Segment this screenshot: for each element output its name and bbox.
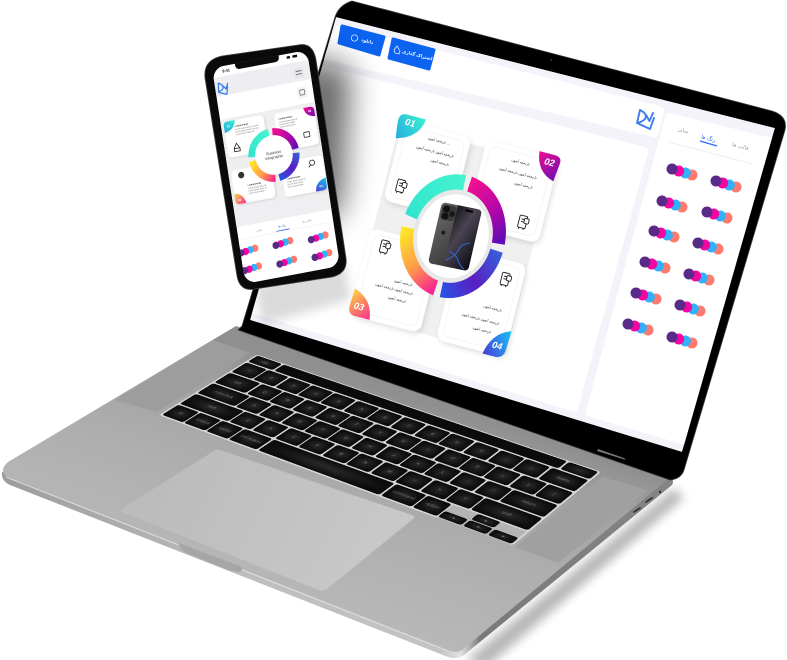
base top surface bbox=[3, 326, 669, 652]
card 01 number: 01 bbox=[404, 117, 416, 129]
phone card 04 number: 04 bbox=[319, 184, 323, 188]
phone card 04 tag bbox=[314, 178, 327, 192]
infographic grey backdrop bbox=[352, 125, 553, 355]
keyboard: X bbox=[267, 427, 274, 430]
keyboard: 4 bbox=[335, 400, 342, 403]
phone card 03 text: Lorem ipsum dolor bbox=[249, 190, 265, 195]
icon: cloud download bbox=[351, 35, 358, 41]
phone card 01 tag bbox=[224, 120, 235, 133]
download button bbox=[339, 26, 384, 55]
keyboard: U bbox=[400, 439, 407, 443]
phone ring chart bbox=[249, 128, 299, 182]
card 04 icon bbox=[500, 272, 512, 288]
phone tab other: سایر bbox=[255, 227, 263, 233]
infographic on screen bbox=[346, 112, 562, 361]
keyboard: : bbox=[465, 480, 471, 483]
keyboard: { bbox=[500, 474, 505, 478]
phone card 02 bbox=[274, 106, 319, 151]
keyboard: J bbox=[391, 453, 397, 457]
base front lip bbox=[2, 472, 673, 658]
phone card 04 text: LOREM IPSUM bbox=[287, 176, 301, 181]
keyboard: O bbox=[449, 456, 456, 460]
keyboard: H bbox=[366, 444, 374, 448]
side panel tabs bbox=[677, 128, 748, 150]
icon: share bbox=[394, 46, 400, 54]
keyboard: S bbox=[273, 411, 280, 415]
keyboard: G bbox=[342, 436, 350, 440]
keyboard: A bbox=[251, 403, 258, 407]
card 01 tag bbox=[394, 113, 426, 144]
keyboard: F bbox=[319, 428, 326, 431]
thumb notch bbox=[178, 543, 242, 572]
phone card 02 text: Lorem ipsum dolor sit bbox=[279, 117, 298, 124]
card 03 text: تاریخچه آیفون bbox=[394, 279, 413, 287]
card 02 text bbox=[496, 155, 540, 190]
ring segment magenta bbox=[457, 184, 511, 244]
smartphone bbox=[205, 45, 346, 289]
phone card 03 icon bbox=[238, 171, 245, 179]
card 03 text: تاریخچه آیفون bbox=[387, 295, 407, 304]
keyboard: ▸ bbox=[500, 534, 507, 538]
phone tabs bbox=[255, 218, 313, 236]
card 01 bbox=[378, 113, 473, 218]
keyboard: M bbox=[386, 469, 394, 474]
colour palette swatches bbox=[622, 164, 742, 348]
keyboard: - bbox=[504, 458, 509, 461]
keyboard: 1 bbox=[268, 376, 274, 380]
keyboard: < bbox=[411, 478, 418, 482]
keyboard: Z bbox=[245, 418, 252, 422]
tab: templates: قالب ها bbox=[731, 142, 750, 152]
phone card 04 text: Lorem ipsum dolor bbox=[288, 181, 304, 186]
phone card 01 text: Lorem ipsum dolor sit amet bbox=[235, 126, 259, 134]
phone card 04 text: Lorem ipsum dolor bbox=[288, 184, 304, 189]
front edge highlight bbox=[6, 477, 448, 651]
keyboard: ▾ bbox=[475, 525, 482, 529]
phone card 04 text bbox=[287, 175, 307, 189]
phone ring chart: infographic bbox=[265, 154, 284, 161]
keyboard: delete bbox=[555, 475, 572, 483]
hinge strip bbox=[597, 449, 626, 460]
keyboard: W bbox=[283, 398, 292, 402]
phone ring centre bbox=[252, 131, 296, 178]
camera module bbox=[440, 204, 457, 222]
phone card 03 text: LOREM IPSUM bbox=[248, 183, 262, 187]
iphone photo bbox=[428, 202, 482, 271]
keyboard: esc bbox=[260, 360, 271, 365]
keyboard: ? bbox=[462, 497, 468, 501]
phone screen bbox=[208, 46, 340, 284]
laptop screen bbox=[250, 17, 775, 452]
ring rim bbox=[403, 180, 503, 292]
usb-c ports bbox=[634, 491, 661, 512]
status icons bbox=[286, 54, 297, 59]
phone logo bbox=[218, 82, 228, 95]
phone card 01 text: Lorem ipsum dolor sit amet bbox=[235, 124, 259, 131]
keyboard: L bbox=[440, 470, 446, 474]
card 04 bbox=[436, 247, 528, 359]
logo bbox=[637, 110, 654, 129]
phone tab templates: قالب ها bbox=[302, 218, 312, 224]
keyboard: return bbox=[520, 499, 538, 507]
phone ring magenta bbox=[272, 128, 296, 153]
phone tab underline bbox=[276, 228, 290, 232]
keyboard: N bbox=[362, 460, 369, 465]
phone card 02 text: Lorem ipsum dolor bbox=[280, 124, 296, 129]
keyboard: 7 bbox=[405, 424, 412, 427]
ring segment blue bbox=[441, 240, 497, 301]
phone card 01 number: 01 bbox=[226, 124, 231, 129]
keyboard: B bbox=[338, 452, 345, 456]
phone ring blue bbox=[276, 153, 299, 177]
ring segment teal bbox=[411, 172, 465, 228]
phone card 02 text: Lorem ipsum dolor bbox=[279, 121, 296, 126]
laptop base bbox=[2, 326, 673, 658]
card 03 text: تاریخچه آیفون تاریخچه آیفون bbox=[375, 282, 414, 296]
phone card 02 text: LOREM IPSUM bbox=[278, 116, 293, 121]
keyboard: E bbox=[307, 406, 314, 410]
phone card 03 number: 03 bbox=[238, 198, 242, 202]
card 02 icon bbox=[517, 215, 530, 231]
keyboard bbox=[160, 355, 600, 545]
keyboard: 6 bbox=[382, 416, 388, 419]
notch bbox=[234, 56, 279, 69]
keyboard: shift bbox=[500, 510, 513, 517]
card 03 bbox=[348, 227, 441, 333]
phone top band bbox=[214, 60, 311, 97]
tab: colours: رنگ ها bbox=[700, 133, 717, 144]
card 03 text bbox=[373, 274, 416, 305]
keyboard: D bbox=[296, 419, 303, 423]
tab: other: سایر bbox=[676, 127, 690, 135]
keyboard: + bbox=[528, 466, 535, 470]
keyboard: R bbox=[329, 414, 337, 418]
card 02 text: تاریخچه آیفون تاریخچه آیفون bbox=[499, 166, 537, 180]
keyboard: ~ bbox=[246, 369, 253, 372]
phone card 02 icon bbox=[304, 131, 310, 138]
phone card 03 text: Lorem ipsum dolor sit bbox=[248, 186, 267, 193]
brand mark bbox=[441, 230, 446, 235]
card 01 text: تاریخچه آیفون bbox=[430, 158, 450, 167]
wallpaper curves bbox=[444, 239, 470, 269]
button label: دانلود bbox=[361, 37, 375, 45]
card 02 bbox=[466, 138, 562, 244]
phone tab colours: رنگ ها bbox=[278, 223, 287, 228]
phone card 01 bbox=[223, 115, 269, 158]
keyboard: fn bbox=[177, 411, 185, 415]
keyboard: 3 bbox=[313, 392, 319, 395]
card 04 text: تاریخچه آیفون bbox=[483, 304, 503, 313]
phone card 01 icon bbox=[233, 143, 240, 152]
card 02 tag bbox=[533, 151, 562, 182]
card 04 tag bbox=[482, 326, 512, 359]
screen background bbox=[250, 17, 775, 452]
phone card 03 text: Lorem ipsum dolor sit bbox=[248, 184, 267, 190]
phone ring teal bbox=[249, 132, 272, 157]
keyboard: P bbox=[474, 465, 481, 469]
phone card 03 tag bbox=[234, 192, 246, 205]
keyboard: option bbox=[424, 501, 441, 510]
right speaker grille bbox=[515, 477, 648, 563]
printer button bbox=[296, 86, 308, 98]
active tab underline bbox=[700, 141, 717, 146]
card 04 number: 04 bbox=[491, 340, 503, 352]
trackpad bbox=[122, 450, 414, 590]
phone palette swatches bbox=[237, 230, 333, 275]
keyboard: command bbox=[391, 490, 417, 500]
soft shadow under laptop bbox=[466, 488, 684, 660]
phone ring yellow bbox=[252, 157, 276, 182]
left speaker grille bbox=[115, 340, 250, 412]
phone card 02 number: 02 bbox=[308, 109, 312, 113]
camera bbox=[550, 59, 552, 61]
phone card 03 bbox=[231, 163, 276, 205]
keyboard: 2 bbox=[290, 384, 297, 387]
share button bbox=[389, 39, 434, 69]
keyboard: 8 bbox=[429, 432, 436, 436]
card 03 icon bbox=[379, 240, 392, 256]
keyboard: V bbox=[314, 443, 321, 447]
keyboard: option bbox=[217, 426, 233, 433]
keyboard: > bbox=[436, 487, 443, 491]
card 01 text: تاریخچه آیفون تاریخچه آیفون bbox=[416, 145, 454, 159]
ring chart bbox=[395, 172, 511, 301]
phone back bbox=[428, 202, 482, 271]
ring segment yellow bbox=[395, 228, 448, 288]
card 01 icon bbox=[395, 179, 408, 195]
keyboard: C bbox=[290, 435, 298, 439]
keyboard: caps lock bbox=[213, 390, 235, 399]
phone card 03 text bbox=[248, 182, 268, 195]
status time: 9:41 bbox=[222, 67, 231, 74]
card 03 number: 03 bbox=[353, 300, 366, 313]
side panel bbox=[586, 113, 772, 445]
keyboard: 0 bbox=[478, 449, 485, 453]
phone shadow on screen bbox=[300, 55, 350, 240]
keyboard: I bbox=[425, 448, 431, 451]
button label: اشتراک گذاری bbox=[402, 48, 434, 61]
card 01 text bbox=[413, 134, 457, 168]
phone card 02 text bbox=[278, 116, 298, 128]
card 04 text bbox=[459, 299, 503, 336]
keyboard: Y bbox=[376, 431, 383, 435]
laptop lid bbox=[238, 1, 785, 480]
phone card 04 text: Lorem ipsum dolor sit bbox=[287, 177, 306, 184]
dynamic island bbox=[465, 209, 473, 213]
card 02 text: تاریخچه آیفون bbox=[514, 181, 533, 190]
keyboard: " bbox=[491, 489, 496, 492]
keyboard: | bbox=[552, 492, 557, 496]
keyboard: T bbox=[353, 422, 360, 426]
phone card 04 bbox=[280, 155, 327, 197]
phone card 01 text bbox=[234, 123, 258, 136]
keyboard: ▴ bbox=[483, 518, 490, 523]
card 02 text: تاریخچه آیفون bbox=[511, 158, 531, 167]
phone card 02 tag bbox=[303, 106, 315, 118]
card 01 text: تاریخچه آیفون ... bbox=[427, 136, 450, 146]
phone card 01 text: LOREM IPSUM bbox=[235, 124, 249, 128]
keyboard: K bbox=[415, 462, 422, 466]
phone ring label: Business bbox=[266, 150, 281, 156]
keyboard: control bbox=[194, 418, 211, 425]
phone screen background bbox=[212, 50, 340, 284]
header panel bbox=[323, 25, 664, 137]
keyboard: command bbox=[239, 434, 263, 444]
keyboard: ◂ bbox=[450, 516, 457, 520]
phone canvas bbox=[220, 102, 331, 227]
keyboard: shift bbox=[206, 404, 218, 410]
keyboard: 5 bbox=[358, 408, 365, 411]
phone card 01 text: Lorem ipsum dolor sit bbox=[236, 130, 255, 136]
keyboard: } bbox=[526, 483, 531, 487]
card 03 tag bbox=[348, 288, 376, 320]
card 04 text: تاریخچه آیفون bbox=[472, 326, 492, 334]
card 04 text: تاریخچه آیفون تاریخچه آیفون bbox=[461, 312, 500, 326]
keyboard: Q bbox=[261, 390, 269, 394]
main canvas panel bbox=[252, 66, 649, 412]
card 02 number: 02 bbox=[543, 156, 556, 169]
phone front bbox=[443, 205, 482, 271]
phone card 04 icon bbox=[308, 160, 315, 167]
phone body bbox=[205, 45, 346, 289]
keyboard: tab bbox=[233, 380, 243, 385]
keyboard: 9 bbox=[454, 440, 460, 444]
menu icon bbox=[294, 68, 304, 78]
